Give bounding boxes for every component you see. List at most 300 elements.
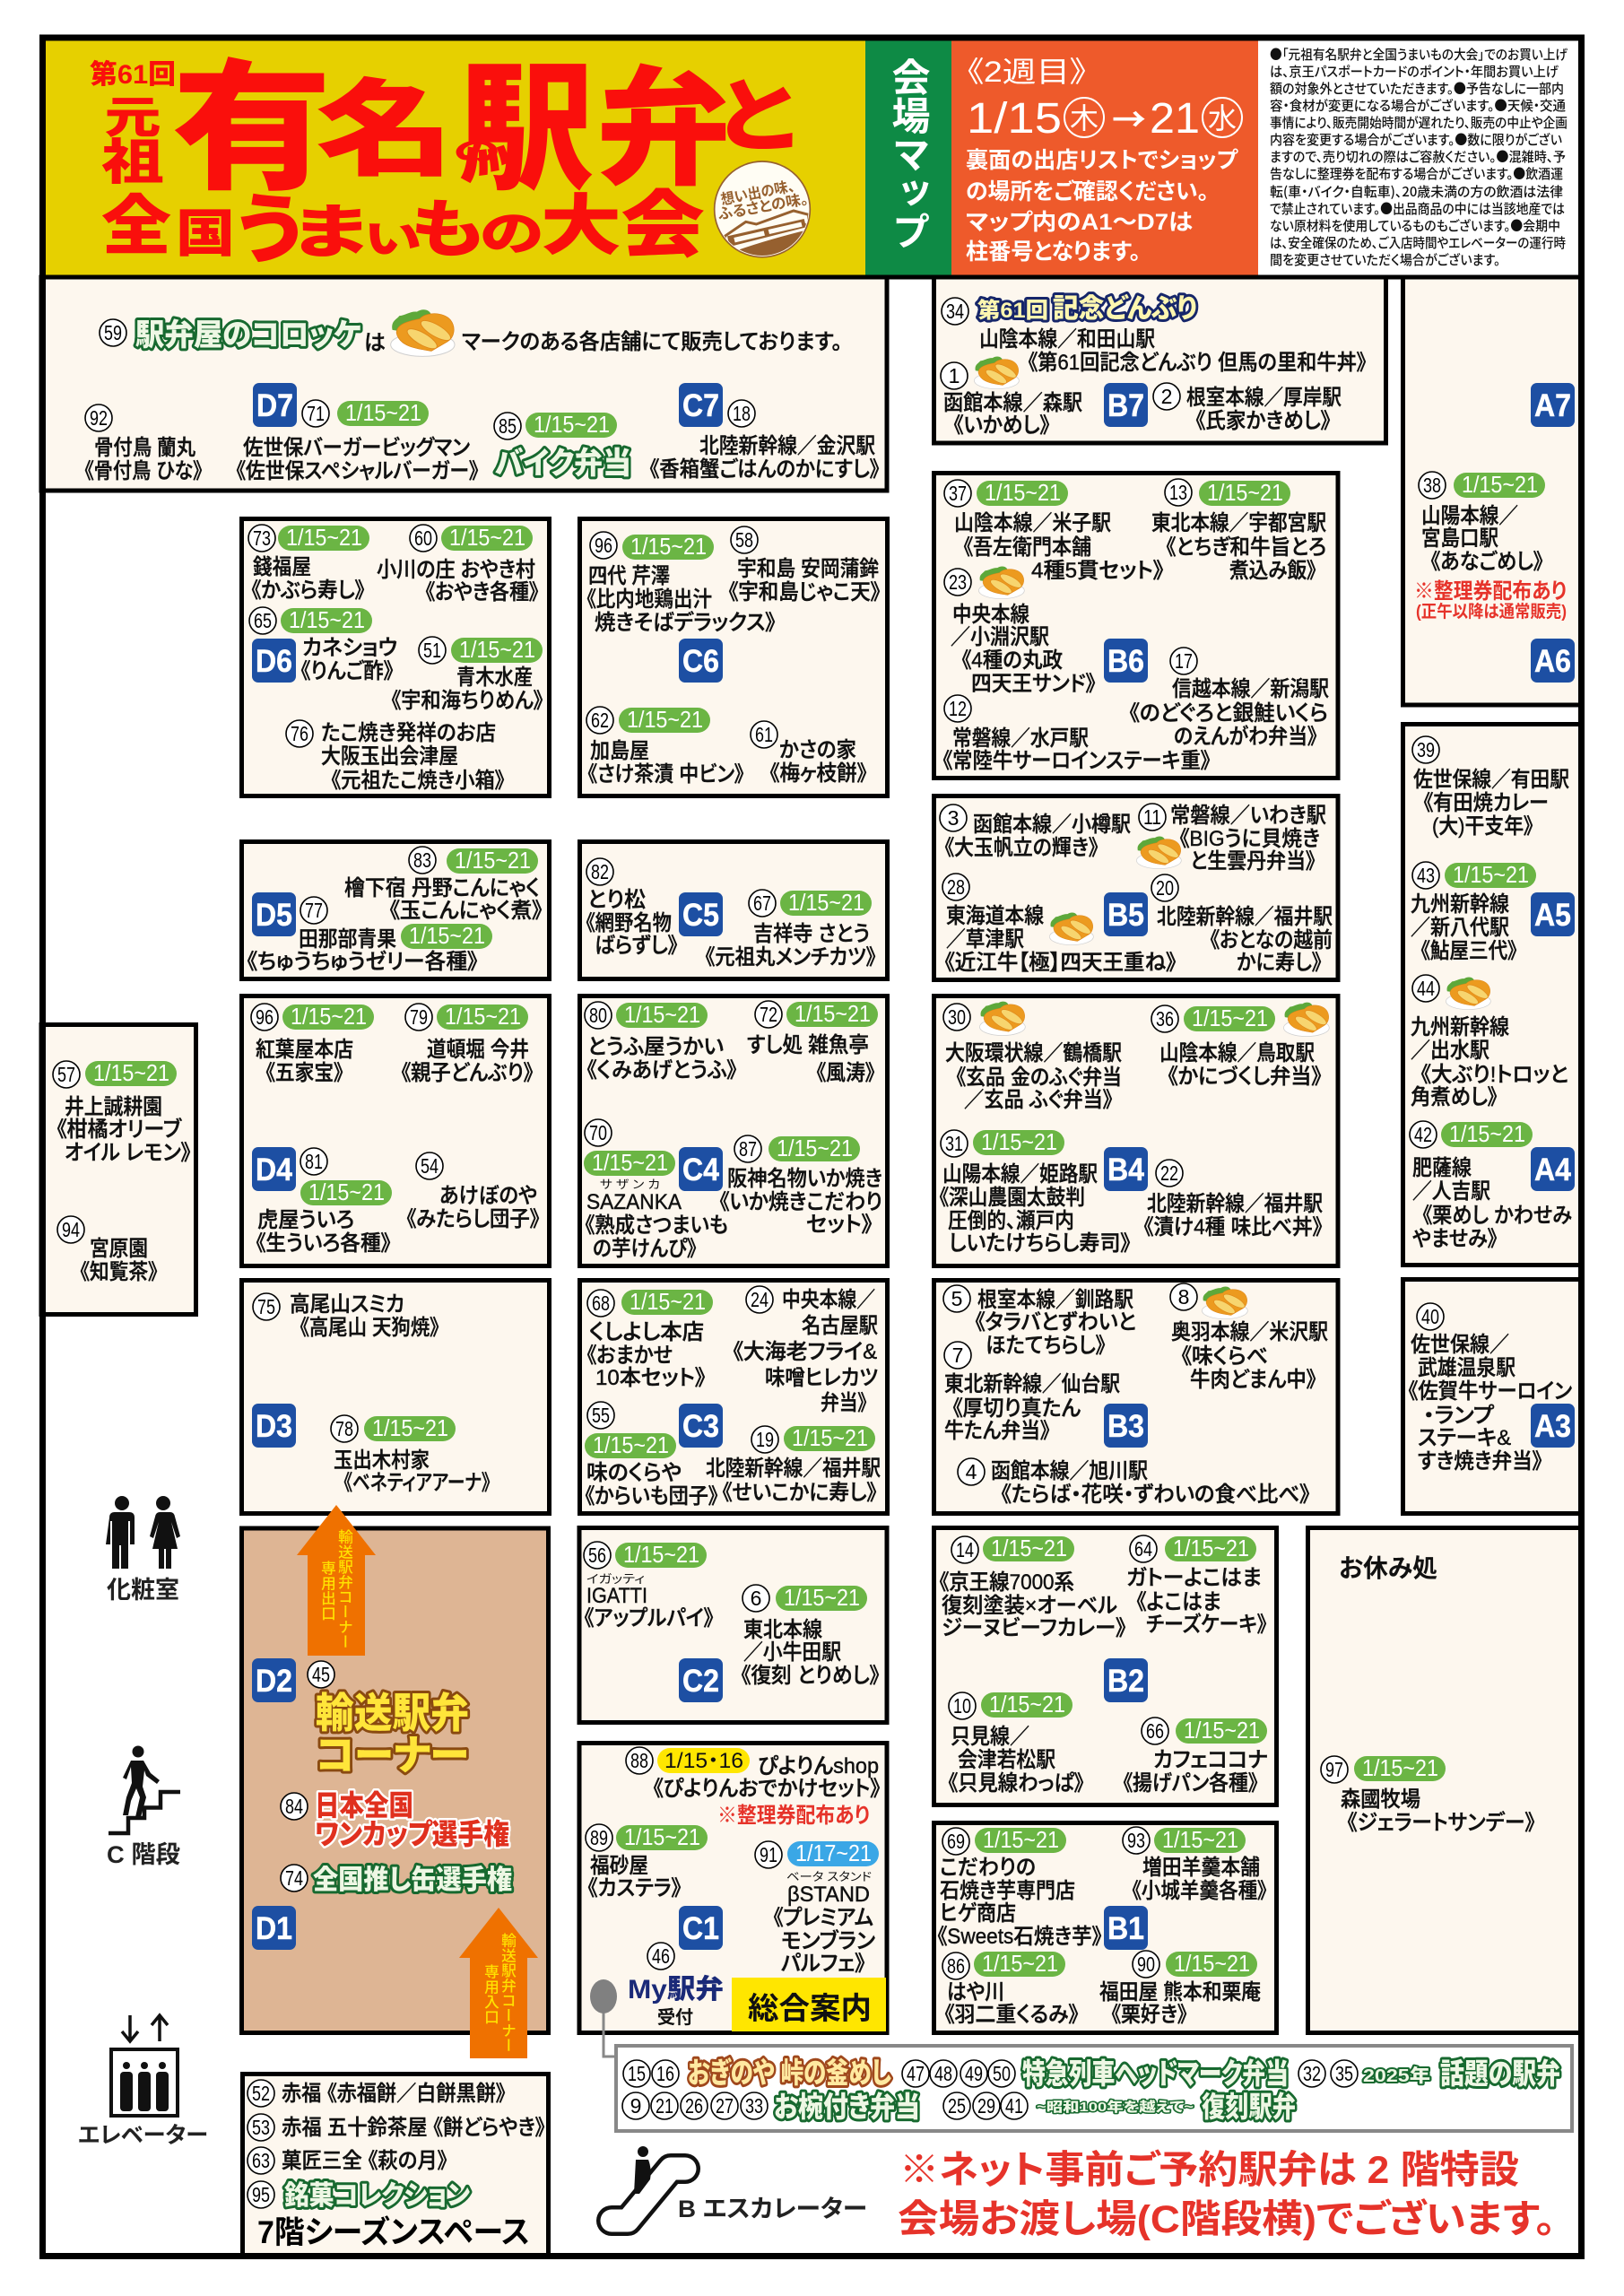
vendor 75 bbox=[253, 1292, 439, 1340]
vendor 71: 71 bbox=[307, 402, 325, 425]
vendor 44 bbox=[1411, 975, 1568, 1109]
vendor 88: 88 bbox=[630, 1749, 648, 1772]
vendor 82: ばらずし》 bbox=[595, 934, 678, 958]
vendor 95: 銘菓コレクション bbox=[284, 2181, 470, 2211]
instructions bbox=[966, 148, 1238, 265]
vendor 28: 東海道本線 bbox=[946, 904, 1044, 928]
vendor 12: 《常陸牛サーロインステーキ重》 bbox=[942, 749, 1211, 773]
vendor 4: 《たらば・花咲・ずわいの食べ比べ》 bbox=[1001, 1483, 1310, 1507]
pin line to bottom box bbox=[590, 1979, 617, 2057]
vendor 71: 佐世保バーガービッグマン bbox=[243, 436, 470, 460]
vendor 76: たこ焼き発祥のお店 bbox=[321, 721, 496, 745]
pillar D6: D6 bbox=[256, 644, 292, 679]
vendor 28: ／草津駅 bbox=[946, 927, 1024, 952]
pillar C1: C1 bbox=[682, 1911, 719, 1946]
rest area heading: お休み処 bbox=[1339, 1554, 1437, 1582]
vendor 80: 1/15~21 bbox=[624, 1001, 700, 1028]
vendor 90: 福田屋 熊本和栗庵 bbox=[1099, 1980, 1261, 2005]
vendor 94 bbox=[57, 1216, 158, 1284]
vendor 73 bbox=[248, 524, 369, 603]
vendor 96: 紅葉屋本店 bbox=[256, 1038, 353, 1062]
instructions: 裏面の出店リストでショップ bbox=[966, 148, 1238, 173]
group: revival bento: 41 bbox=[1005, 2094, 1023, 2118]
icon: escalator B bbox=[612, 2146, 867, 2222]
vendor 40: 武雄温泉駅 bbox=[1418, 1356, 1515, 1380]
dates bbox=[967, 94, 1242, 143]
vendor 54 bbox=[406, 1152, 540, 1231]
vendor 69: ヒゲ商店 bbox=[940, 1901, 1016, 1926]
group: headmark bento bbox=[902, 2057, 1289, 2090]
vendor 23: 四天王サンド》 bbox=[971, 672, 1096, 696]
vendor 62: 加島屋 bbox=[590, 739, 649, 763]
group: bowl bento: 9 bbox=[630, 2094, 641, 2118]
vendor 11: 《BIGうに貝焼き bbox=[1179, 827, 1320, 851]
vendor 64: 《よこはま bbox=[1136, 1590, 1221, 1614]
panel: B3 bbox=[934, 1281, 1338, 1514]
vendor 30: 《玄品 金のふぐ弁当 bbox=[956, 1065, 1122, 1090]
vendor 76: 大阪玉出会津屋 bbox=[321, 744, 458, 769]
vendor 81: 81 bbox=[305, 1150, 323, 1173]
vendor 91: 1/17~21 bbox=[795, 1839, 872, 1866]
title: main heading: 有 bbox=[172, 49, 332, 207]
vendor 17: のえんがわ弁当》 bbox=[1174, 725, 1317, 749]
vendor 45 bbox=[308, 1661, 469, 1779]
pillar B7: B7 bbox=[1107, 388, 1144, 423]
vendor 70: の芋けんぴ》 bbox=[593, 1237, 697, 1261]
vendor 30 bbox=[943, 1002, 1122, 1112]
vendor 86: 《羽二重くるみ》 bbox=[944, 2003, 1079, 2027]
vendor 61: かさの家 bbox=[779, 738, 856, 762]
vendor 8: 奥羽本線／米沢駅 bbox=[1171, 1320, 1328, 1344]
notes panel: 容・食材が変更になる場合がございます。●天候・交通 bbox=[1270, 96, 1566, 115]
callout: pre-order notice: 会場お渡し場(C階段横)でございます。 bbox=[898, 2197, 1556, 2241]
vendor 80: とうふ屋うかい bbox=[587, 1035, 724, 1059]
vendor 31: 31 bbox=[945, 1132, 963, 1155]
vendor 42: 1/15~21 bbox=[1449, 1120, 1525, 1147]
title: main heading: 祖 bbox=[101, 135, 164, 190]
vendor 71: 1/15~21 bbox=[345, 399, 421, 426]
pillar A4: A4 bbox=[1534, 1152, 1571, 1187]
vendor 65: 1/15~21 bbox=[289, 606, 365, 633]
pillar D2: D2 bbox=[256, 1664, 292, 1699]
vendor 38: 山陽本線／ bbox=[1421, 504, 1518, 528]
vendor 24: 弁当》 bbox=[821, 1391, 867, 1415]
stamp: memories of taste bbox=[715, 161, 810, 257]
vendor 54: 《みたらし団子》 bbox=[406, 1207, 540, 1231]
vendor 38: (正午以降は通常販売) bbox=[1416, 602, 1567, 622]
vendor 79: 79 bbox=[410, 1005, 428, 1029]
vendor 71 bbox=[236, 399, 479, 483]
notes panel: 内容を変更する場合がございます。●数に限りがござい bbox=[1270, 130, 1562, 149]
vendor 90: 《栗好き》 bbox=[1111, 2003, 1187, 2027]
vendor 42: やませみ》 bbox=[1412, 1227, 1498, 1251]
vendor 64: 64 bbox=[1134, 1537, 1152, 1561]
vendor 22: 北陸新幹線／福井駅 bbox=[1147, 1192, 1323, 1216]
vendor 85: バイク弁当 bbox=[495, 447, 631, 481]
vendor 13 bbox=[1151, 479, 1326, 583]
panel: B2 bbox=[934, 1528, 1277, 1805]
vendor 70: サ ザ ン カ bbox=[600, 1178, 660, 1191]
vendor 51: 青木水産 bbox=[456, 665, 533, 690]
orange panel: dates bbox=[951, 40, 1258, 275]
vendor 23: 中央本線 bbox=[952, 603, 1029, 627]
panel: C2 bbox=[579, 1528, 887, 1722]
vendor 96 bbox=[586, 532, 776, 635]
vendor 51: 1/15~21 bbox=[459, 636, 535, 663]
vendor 82: 《網野名物 bbox=[586, 911, 672, 935]
panel: rest area bbox=[1307, 1528, 1582, 2032]
vendor 97: 1/15~21 bbox=[1362, 1754, 1438, 1781]
arrow: corner entrance bbox=[459, 1908, 538, 2058]
vendor 89: 89 bbox=[590, 1826, 608, 1849]
vendor 96: 《五家宝》 bbox=[265, 1061, 343, 1085]
vendor 12 bbox=[942, 695, 1211, 773]
vendor 82: 82 bbox=[591, 860, 609, 883]
stamp: memories of taste: ふるさとの味。 bbox=[716, 190, 810, 223]
vendor 13: 東北本線／宇都宮駅 bbox=[1151, 511, 1326, 535]
pillar C2: C2 bbox=[682, 1664, 719, 1699]
vendor 14: 14 bbox=[956, 1538, 974, 1561]
vendor 89: 福砂屋 bbox=[590, 1854, 648, 1878]
vendor 93: 《小城羊羹各種》 bbox=[1132, 1879, 1267, 1903]
vendor 56 bbox=[584, 1541, 714, 1631]
vendor 91: 91 bbox=[760, 1843, 777, 1866]
vendor 44: 九州新幹線 bbox=[1411, 1015, 1509, 1039]
vendor 5: 根室本線／釧路駅 bbox=[977, 1288, 1133, 1312]
vendor 19: 1/15~21 bbox=[792, 1424, 868, 1451]
vendor 58: 58 bbox=[735, 528, 753, 552]
vendor 93: 93 bbox=[1127, 1829, 1145, 1852]
vendor 20: 《おとなの越前 bbox=[1210, 928, 1333, 952]
group: revival bento: ~昭和100年を越えて~ bbox=[1037, 2099, 1194, 2115]
pillar D3: D3 bbox=[256, 1409, 292, 1444]
vendor 45: 45 bbox=[312, 1663, 330, 1686]
title: main heading: 会 bbox=[621, 184, 705, 266]
vendor 58 bbox=[728, 526, 881, 604]
panel: croquette / D7 / C7 bbox=[41, 277, 887, 491]
vendor 68 bbox=[586, 1288, 713, 1390]
vendor 78: 1/15~21 bbox=[372, 1414, 448, 1441]
vendor 70: SAZANKA bbox=[586, 1190, 682, 1214]
vendor 54: 54 bbox=[421, 1154, 439, 1178]
vendor 28 bbox=[942, 874, 1177, 975]
header banner bbox=[46, 40, 865, 275]
vendor 5: ほたてちらし》 bbox=[986, 1334, 1106, 1358]
vendor 37: 4種5貫セット》 bbox=[1031, 559, 1164, 583]
vendor 36: 1/15~21 bbox=[1192, 1004, 1268, 1031]
vendor 67 bbox=[705, 889, 876, 970]
dates: → bbox=[1112, 94, 1146, 141]
vendor 87 bbox=[719, 1135, 882, 1237]
pillar C3: C3 bbox=[682, 1409, 719, 1444]
vendor 30: 30 bbox=[948, 1005, 966, 1029]
title: main heading: 名 bbox=[316, 73, 455, 189]
vendor 34: 記念どんぶり bbox=[1053, 294, 1197, 324]
group: bowl bento bbox=[622, 2091, 920, 2123]
icon: elevator: エレベーター bbox=[78, 2123, 208, 2148]
vendor 18 bbox=[649, 400, 880, 482]
vendor 51: 51 bbox=[423, 639, 441, 662]
vendor 89: 1/15~21 bbox=[624, 1823, 700, 1850]
information desk: 総合案内 bbox=[748, 1992, 872, 2026]
vendor 36 bbox=[1151, 1003, 1329, 1089]
vendor 65 bbox=[249, 606, 397, 683]
vendor 53: 赤福 五十鈴茶屋 《餅どらやき》 bbox=[282, 2116, 545, 2140]
vendor 40: 佐世保線／ bbox=[1411, 1333, 1509, 1357]
arrow: corner exit bbox=[297, 1505, 376, 1656]
vendor 39: 39 bbox=[1417, 738, 1435, 761]
pillar A5: A5 bbox=[1534, 898, 1571, 933]
vendor 75: 75 bbox=[257, 1295, 275, 1318]
vendor 39: (大)干支年》 bbox=[1432, 814, 1533, 839]
vendor 30: ／玄品 ふぐ弁当》 bbox=[964, 1088, 1113, 1112]
vendor 65: 《りんご酢》 bbox=[300, 659, 394, 683]
group: 2025 topical: 2025年 bbox=[1363, 2065, 1430, 2086]
vendor 12: 12 bbox=[949, 697, 967, 720]
vendor 73: 73 bbox=[253, 526, 271, 550]
panel: C3 bbox=[579, 1281, 888, 1514]
vendor 83: 1/15~21 bbox=[455, 847, 531, 874]
group: headmark bento: 特急列車ヘッドマーク弁当 bbox=[1022, 2057, 1289, 2090]
vendor 19: 《せいこかに寿し》 bbox=[722, 1481, 877, 1505]
vendor 7: 牛たん弁当》 bbox=[944, 1419, 1050, 1443]
vendor 44: 角煮めし》 bbox=[1411, 1085, 1498, 1109]
vendor 79: 1/15~21 bbox=[445, 1003, 521, 1030]
vendor 38: 38 bbox=[1423, 474, 1441, 497]
panel: 7F season space bbox=[242, 2074, 549, 2257]
vendor 10: 10 bbox=[953, 1694, 971, 1718]
group: bowl bento: 33 bbox=[745, 2094, 763, 2118]
vendor 46: My駅弁 bbox=[628, 1975, 724, 2005]
panel: side shop 57 / 94 bbox=[41, 1024, 195, 1315]
vendor 40: ステーキ& bbox=[1418, 1426, 1511, 1450]
vendor 17 bbox=[1129, 648, 1329, 749]
vendor 43: 43 bbox=[1417, 864, 1435, 887]
vendor 81: 《生ういろ各種》 bbox=[256, 1231, 391, 1256]
vendor 86: 86 bbox=[947, 1954, 965, 1978]
vendor 86: 1/15~21 bbox=[982, 1950, 1058, 1977]
vendor 82: とり松 bbox=[587, 888, 646, 912]
vendor 38: 《あなごめし》 bbox=[1430, 550, 1543, 574]
title: main heading: も bbox=[411, 196, 484, 265]
vendor 1: 1 bbox=[949, 364, 960, 387]
vendor 97 bbox=[1321, 1754, 1535, 1835]
vendor 39 bbox=[1412, 736, 1569, 839]
vendor 73: 錢福屋 bbox=[253, 555, 311, 579]
notes panel: 事情により、販売開始時間が遅れたり、販売の中止や企画 bbox=[1270, 113, 1568, 132]
vendor 36: 36 bbox=[1156, 1007, 1174, 1031]
group: headmark bento: 48 bbox=[934, 2062, 952, 2085]
vendor 20: かに寿し》 bbox=[1237, 951, 1322, 975]
panel: D3 bbox=[242, 1281, 549, 1514]
pillar D1: D1 bbox=[256, 1911, 292, 1946]
pillar C7: C7 bbox=[682, 388, 719, 423]
vendor 88: ぴよりんshop bbox=[758, 1754, 879, 1779]
icon: escalator B: B エスカレーター bbox=[678, 2196, 867, 2222]
vendor 10 bbox=[948, 1691, 1084, 1796]
vendor 70: 1/15~21 bbox=[592, 1149, 668, 1176]
vendor 83: 檜下宿 丹野こんにゃく bbox=[344, 876, 540, 900]
vendor 80: 80 bbox=[589, 1004, 607, 1027]
title: main heading: 駅 bbox=[459, 53, 594, 207]
information desk bbox=[732, 1978, 886, 2031]
vendor 62: 62 bbox=[591, 709, 609, 732]
vendor 34: 第61回 bbox=[977, 298, 1048, 323]
vendor 69: こだわりの bbox=[940, 1856, 1036, 1880]
callout: pre-order notice: ※ネット事前ご予約駅弁は 2 階特設 bbox=[899, 2149, 1519, 2192]
vendor 23: 《4種の丸政 bbox=[961, 648, 1063, 673]
vendor 14: ジーヌビーフカレー》 bbox=[942, 1616, 1126, 1640]
vendor 24: 《大海老フライ& bbox=[733, 1340, 877, 1364]
vendor 31: しいたけちらし寿司》 bbox=[949, 1231, 1131, 1256]
vendor 77: 《ちゅうちゅうゼリー各種》 bbox=[247, 950, 478, 974]
vendor 56: 1/15~21 bbox=[623, 1541, 699, 1568]
panel: C4 bbox=[579, 996, 888, 1266]
vendor 18: 北陸新幹線／金沢駅 bbox=[699, 434, 875, 458]
vendor 60: 60 bbox=[414, 526, 432, 550]
vendor 42: 肥薩線 bbox=[1412, 1156, 1472, 1180]
vendor 37: 山陰本線／米子駅 bbox=[954, 511, 1111, 535]
icon: restroom bbox=[106, 1496, 180, 1604]
vendor 55: 味のくらや bbox=[586, 1461, 682, 1485]
vendor 72: 72 bbox=[760, 1003, 777, 1026]
vendor 75: 《高尾山 天狗焼》 bbox=[300, 1316, 439, 1340]
vendor 86: はや川 bbox=[947, 1980, 1004, 2005]
vendor 7 bbox=[944, 1342, 1120, 1443]
vendor 80: 《くみあげとうふ》 bbox=[586, 1058, 737, 1083]
vendor 81: 1/15~21 bbox=[308, 1178, 385, 1205]
croquette notice: 駅弁屋のコロッケ bbox=[135, 318, 361, 352]
vendor 90: 1/15~21 bbox=[1174, 1950, 1250, 1977]
panel: A5 / A4 bbox=[1403, 725, 1582, 1265]
title: main heading: 全 bbox=[101, 190, 171, 262]
vendor 42: 《栗めし かわせみ bbox=[1422, 1204, 1572, 1228]
title: main heading: の bbox=[454, 137, 499, 166]
vendor 72 bbox=[747, 1000, 878, 1085]
vendor 69: 1/15~21 bbox=[983, 1826, 1059, 1853]
vendor 64 bbox=[1126, 1535, 1267, 1637]
panel: C5 bbox=[579, 841, 888, 979]
dates: 水 bbox=[1208, 102, 1237, 135]
vendor 79: 道頓堀 今井 bbox=[427, 1038, 529, 1062]
vendor 87: セット》 bbox=[806, 1213, 873, 1237]
vendor 73: 《かぶら寿し》 bbox=[251, 578, 365, 603]
vendor 83: 《玉こんにゃく煮》 bbox=[389, 899, 543, 923]
vendor 1 bbox=[941, 357, 1082, 438]
vendor 8: 8 bbox=[1178, 1285, 1189, 1309]
group: headmark bento: 47 bbox=[907, 2062, 925, 2085]
vendor 6: 東北本線 bbox=[743, 1618, 822, 1642]
panel: B6 bbox=[934, 474, 1338, 778]
vendor 12: 常磐線／水戸駅 bbox=[952, 726, 1089, 751]
pillar B5: B5 bbox=[1107, 898, 1144, 933]
vendor 23: 23 bbox=[949, 570, 967, 594]
group: revival bento bbox=[943, 2091, 1296, 2123]
vendor 42: ／人吉駅 bbox=[1412, 1179, 1490, 1204]
pillar B6: B6 bbox=[1107, 644, 1144, 679]
vendor 78: 玉出木村家 bbox=[334, 1448, 430, 1473]
vendor 40: すき焼き弁当》 bbox=[1418, 1449, 1542, 1474]
instructions: 柱番号となります。 bbox=[966, 239, 1141, 265]
vendor 64: チーズケーキ》 bbox=[1146, 1613, 1267, 1637]
vendor 11 bbox=[1136, 804, 1326, 874]
vendor 31: 山陽本線／姫路駅 bbox=[942, 1162, 1098, 1187]
vendor 2 bbox=[1153, 383, 1342, 433]
vendor 5: 《タラバとずわいと bbox=[975, 1310, 1136, 1335]
vendor 6 bbox=[741, 1584, 880, 1688]
group: revival bento: 復刻駅弁 bbox=[1202, 2091, 1296, 2123]
vendor 62: 《さけ茶漬 中ビン》 bbox=[587, 762, 744, 787]
notes panel bbox=[1258, 40, 1577, 275]
panel: B7 bbox=[934, 277, 1386, 443]
vendor 57: 井上誠耕園 bbox=[65, 1095, 162, 1119]
vendor 72: すし処 雑魚亭 bbox=[747, 1033, 869, 1057]
vendor 84: 日本全国 bbox=[315, 1789, 413, 1822]
title: main heading: 弁 bbox=[596, 58, 731, 202]
vendor 77: 77 bbox=[305, 899, 323, 922]
vendor 78: 78 bbox=[335, 1417, 353, 1440]
vendor 57: 57 bbox=[57, 1063, 75, 1086]
vendor 46: 46 bbox=[652, 1944, 670, 1968]
vendor 22 bbox=[1143, 1160, 1323, 1239]
vendor 57 bbox=[53, 1059, 191, 1165]
vendor 81 bbox=[256, 1148, 392, 1256]
vendor 38: 1/15~21 bbox=[1462, 471, 1538, 498]
arrow: corner exit: 輸送駅弁コーナー bbox=[335, 1529, 353, 1649]
vendor 5 bbox=[943, 1285, 1136, 1358]
vendor 31: 1/15~21 bbox=[981, 1128, 1057, 1155]
croquette notice: 59 bbox=[104, 321, 122, 344]
notes panel: ●「元祖有名駅弁と全国うまいもの大会」でのお買い上げ bbox=[1270, 45, 1568, 64]
vendor 92: 92 bbox=[90, 406, 108, 430]
vendor 69: 69 bbox=[947, 1830, 965, 1853]
notes panel: 告なしに整理券を配布する場合がございます。●飲酒運 bbox=[1270, 164, 1563, 183]
vendor 69 bbox=[937, 1826, 1102, 1949]
vendor 96: 焼きそばデラックス》 bbox=[595, 610, 776, 635]
vendor 3: 3 bbox=[948, 806, 959, 830]
vendor 17: 信越本線／新潟駅 bbox=[1172, 677, 1329, 701]
vendor 40 bbox=[1408, 1303, 1572, 1474]
vendor 95: 95 bbox=[252, 2183, 270, 2206]
vendor 86 bbox=[942, 1950, 1079, 2027]
vendor 34 bbox=[942, 294, 1367, 375]
vendor 72: 《風涛》 bbox=[816, 1061, 875, 1085]
group: 2025 topical: 32 bbox=[1303, 2062, 1321, 2085]
vendor 14: 《京王線7000系 bbox=[939, 1570, 1074, 1595]
group: headmark bento: 50 bbox=[993, 2062, 1011, 2085]
vendor 88 bbox=[626, 1747, 881, 1828]
box: special ekiben numbers bbox=[616, 2046, 1572, 2131]
vendor 10: 1/15~21 bbox=[989, 1691, 1065, 1718]
vendor 31 bbox=[939, 1128, 1131, 1256]
vendor 42 bbox=[1410, 1120, 1572, 1251]
group: bowl bento: 21 bbox=[656, 2094, 673, 2118]
vendor 66: 1/15~21 bbox=[1184, 1717, 1260, 1744]
vendor 30: 大阪環状線／鶴橋駅 bbox=[945, 1041, 1122, 1065]
vendor 96: 《比内地鶏出汁 bbox=[586, 587, 712, 612]
vendor 93: 1/15~21 bbox=[1162, 1826, 1238, 1853]
vendor 96: 96 bbox=[256, 1005, 274, 1029]
vendor 20: 20 bbox=[1156, 876, 1174, 900]
group: bowl bento: 26 bbox=[685, 2094, 703, 2118]
vendor 87: 《いか焼きこだわり bbox=[719, 1190, 882, 1214]
vendor 28: 《近江牛【極】四天王重ね》 bbox=[944, 951, 1177, 975]
vendor 37: 37 bbox=[949, 482, 967, 505]
vendor 13: 13 bbox=[1169, 481, 1187, 504]
vendor 8 bbox=[1170, 1283, 1328, 1392]
vendor 13: 煮込み飯》 bbox=[1229, 559, 1316, 583]
vendor 23: ／小淵沢駅 bbox=[951, 625, 1049, 649]
